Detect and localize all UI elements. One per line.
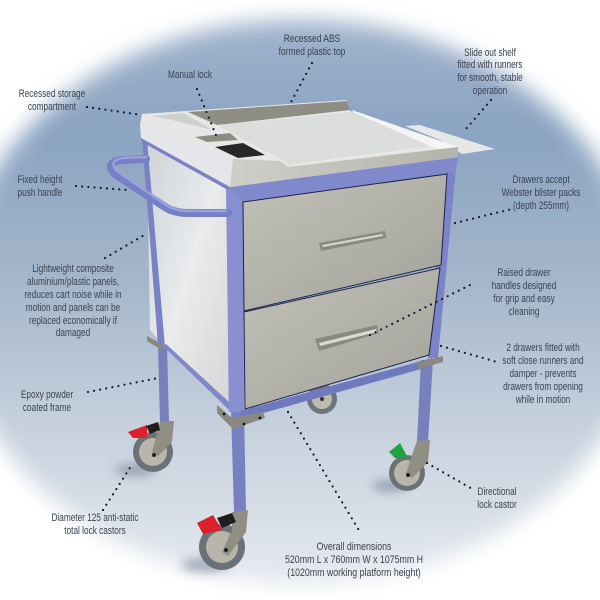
label: overall dimensions: (1020mm working platform height) [287, 567, 421, 579]
bottom front rail [240, 358, 432, 419]
label: recessed ABS top: Recessed ABS [284, 33, 341, 45]
label: directional castor: lock castor [477, 499, 517, 511]
label: anti-static castors: total lock castors [64, 525, 126, 537]
drawer handle upper [319, 231, 386, 251]
label: soft close runners: while in motion [515, 394, 570, 406]
label: recessed ABS top: formed plastic top [279, 46, 346, 58]
purple strip under top [141, 138, 230, 190]
top front lip [230, 147, 458, 187]
top side surface [141, 123, 233, 187]
recessed storage compartment [152, 113, 213, 130]
drawer lower [244, 268, 440, 409]
right castor with green brake [389, 440, 430, 491]
rear hidden castor [307, 384, 337, 414]
right leg [417, 360, 433, 442]
label: slide out shelf: operation [473, 85, 507, 97]
rear left leg [158, 345, 169, 422]
raised right rim [352, 110, 458, 149]
label: composite panels: Lightweight composite [32, 263, 114, 275]
label: epoxy frame: coated frame [23, 402, 71, 414]
label: recessed storage: Recessed storage [19, 88, 85, 100]
label: composite panels: aluminium/plastic panels, [27, 276, 119, 288]
front frame upright [226, 186, 244, 412]
label: directional castor: Directional [478, 486, 516, 498]
label: slide out shelf: fitted with runners [457, 59, 523, 71]
label: raised handles: for grip and easy [493, 293, 555, 305]
lower side rail [162, 344, 229, 410]
label: drawers accept: Webster blister packs [502, 187, 580, 199]
label: push handle: Fixed height [18, 174, 63, 186]
label: composite panels: reduces cart noise while in [24, 289, 122, 301]
label: soft close runners: 2 drawers fitted with [506, 342, 580, 354]
label: push handle: push handle [18, 187, 62, 199]
label: drawers accept: (depth 255mm) [513, 200, 569, 212]
label: overall dimensions: Overall dimensions [317, 541, 391, 553]
label: slide out shelf: Slide out shelf [464, 47, 516, 59]
leader dots [76, 63, 512, 532]
trolley top body [140, 100, 458, 187]
label: raised handles: handles designed [492, 280, 556, 292]
rear frame upright [142, 138, 165, 347]
recessed abs rear wall [188, 101, 350, 125]
label: soft close runners: soft close runners and [502, 355, 584, 367]
label: overall dimensions: 520mm L x 760mm W x 1075mm H [285, 554, 423, 566]
label: drawers accept: Drawers accept [512, 174, 570, 186]
label: soft close runners: drawers from opening [503, 381, 583, 393]
corner bracket right [417, 356, 443, 369]
corner bracket front [217, 405, 265, 429]
top front rail [228, 157, 458, 202]
slide-out shelf [405, 125, 495, 154]
corner bracket rear left [147, 336, 163, 351]
label: raised handles: Raised drawer [497, 267, 551, 279]
top tray surface [217, 112, 437, 165]
right frame upright [428, 157, 457, 358]
side panel [147, 145, 228, 408]
label: anti-static castors: Diameter 125 anti-static [51, 512, 139, 524]
label: manual lock: Manual lock [168, 69, 212, 81]
wheel shadows [115, 464, 408, 572]
label: raised handles: cleaning [509, 306, 539, 318]
manual lock recess [195, 133, 238, 142]
drawer upper [243, 174, 447, 311]
drawer handle lower [315, 325, 379, 351]
label: composite panels: motion and panels can be [26, 302, 120, 314]
lock mechanism [215, 143, 265, 158]
label: recessed storage: compartment [28, 101, 76, 113]
push handle [111, 157, 228, 213]
rear left castor with red brake [128, 421, 174, 472]
trolley illustration [111, 100, 495, 572]
front leg [231, 410, 246, 512]
label: composite panels: replaced economically if [29, 315, 117, 327]
label: slide out shelf: for smooth, stable [457, 72, 523, 84]
label: composite panels: damaged [56, 327, 90, 339]
label: epoxy frame: Epoxy powder [21, 389, 74, 401]
label: soft close runners: damper - prevents [510, 368, 577, 380]
front castor with red brake [197, 510, 248, 570]
